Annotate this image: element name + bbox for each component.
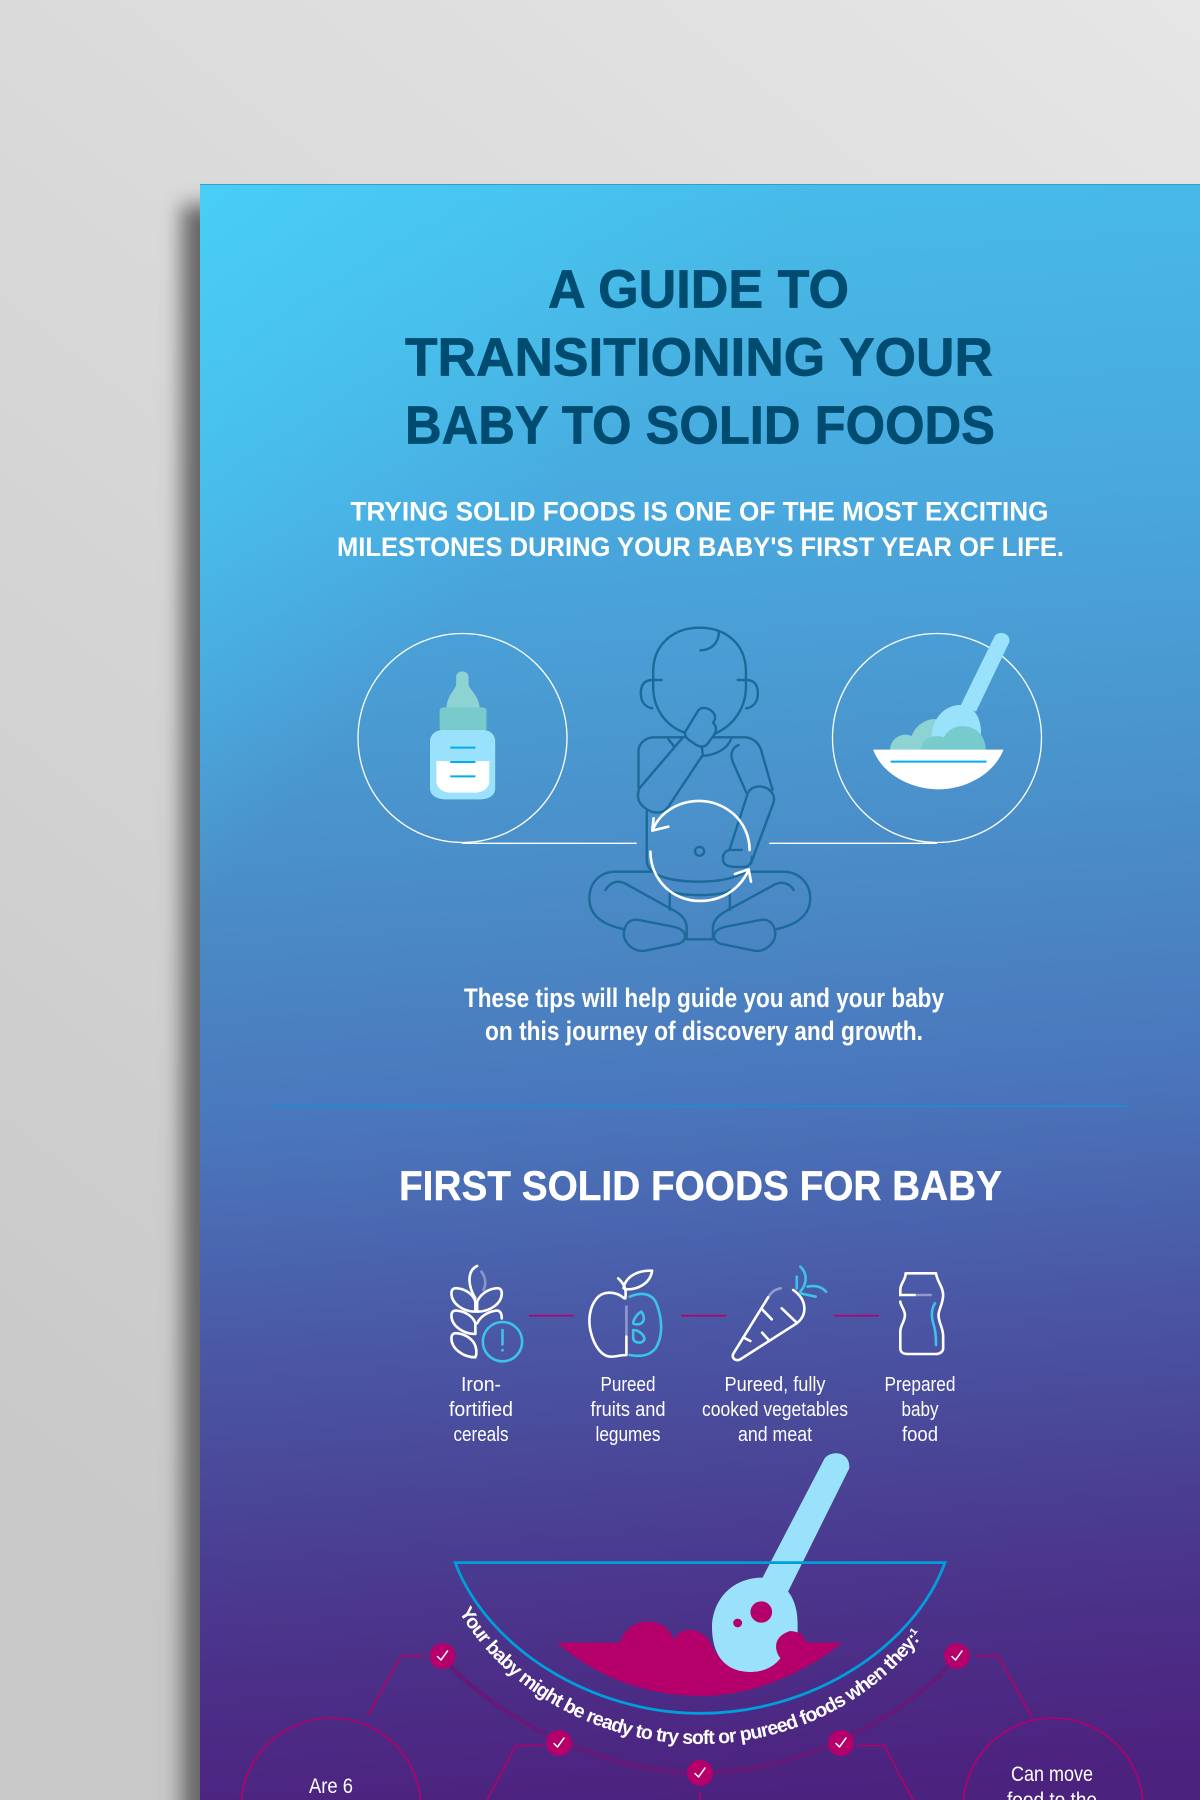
heading: first solid foods: FIRST SOLID FOODS FOR BABY xyxy=(399,1162,1002,1209)
subtitle: TRYING SOLID FOODS IS ONE OF THE MOST EXCITING xyxy=(350,496,1048,526)
illustration: large bowl and spoon xyxy=(455,1453,945,1713)
label: vegetables: and meat xyxy=(738,1424,812,1446)
label: vegetables: cooked vegetables xyxy=(702,1399,848,1421)
panel: gradient poster xyxy=(200,184,1200,1800)
icon: seated baby outline xyxy=(589,628,810,951)
label: fruits: fruits and xyxy=(590,1399,666,1421)
label: baby food: baby xyxy=(902,1399,938,1421)
connectors between icons xyxy=(529,1315,879,1317)
text: tips intro xyxy=(464,983,944,1046)
label: cereals: fortified xyxy=(449,1399,513,1421)
readiness arc xyxy=(442,1656,957,1773)
icon: wheat cereal xyxy=(451,1266,522,1361)
title: BABY TO SOLID FOODS xyxy=(405,396,995,456)
text: tips intro: on this journey of discovery and growth. xyxy=(485,1016,923,1046)
label: vegetables: Pureed, fully xyxy=(724,1374,826,1396)
curved heading: Your baby might be ready to try soft or pureed foods when they:¹ xyxy=(462,1605,919,1746)
bowl outline xyxy=(455,1563,945,1713)
connector lines to readiness circles xyxy=(368,1656,1032,1800)
icon: bowl circle xyxy=(832,634,1042,842)
spoon food spots xyxy=(733,1601,806,1658)
title xyxy=(405,260,995,456)
check markers xyxy=(430,1643,970,1786)
label: fruits xyxy=(590,1374,666,1446)
circle: are 6 months: Are 6 xyxy=(309,1775,353,1798)
subtitle: MILESTONES DURING YOUR BABY'S FIRST YEAR OF LIFE. xyxy=(337,532,1064,562)
icon: bottle xyxy=(430,671,495,799)
label: fruits: Pureed xyxy=(600,1374,656,1396)
label: fruits: legumes xyxy=(596,1424,660,1446)
label: baby food: food xyxy=(902,1424,938,1446)
connector lines xyxy=(462,842,937,844)
circle: can move food: Can move xyxy=(1011,1763,1093,1786)
icon: baby food jar xyxy=(900,1273,943,1354)
food icons row xyxy=(451,1266,943,1361)
food labels xyxy=(449,1374,956,1446)
label: cereals xyxy=(449,1374,513,1446)
subtitle xyxy=(337,496,1064,562)
icon: apple xyxy=(589,1271,661,1357)
icon: bottle circle xyxy=(358,634,567,842)
circle: are 6 months xyxy=(241,1718,421,1800)
card shadow xyxy=(182,205,1200,1800)
illustration: baby with bottle and bowl xyxy=(358,628,1042,951)
icon: carrot xyxy=(733,1267,826,1360)
title: TRANSITIONING YOUR xyxy=(405,328,993,388)
puree xyxy=(557,1622,842,1696)
label: vegetables xyxy=(702,1374,848,1446)
title: A GUIDE TO xyxy=(548,260,849,320)
label: baby food: Prepared xyxy=(884,1374,956,1396)
icon: digestion arrows xyxy=(650,801,751,901)
spoon xyxy=(761,1453,849,1592)
label: baby food xyxy=(884,1374,956,1446)
label: cereals: cereals xyxy=(454,1424,508,1446)
label: cereals: Iron- xyxy=(461,1374,501,1396)
text: tips intro: These tips will help guide you and your baby xyxy=(464,983,944,1013)
circle: can move food xyxy=(963,1718,1143,1800)
icon: bowl with spoon xyxy=(873,633,1010,789)
